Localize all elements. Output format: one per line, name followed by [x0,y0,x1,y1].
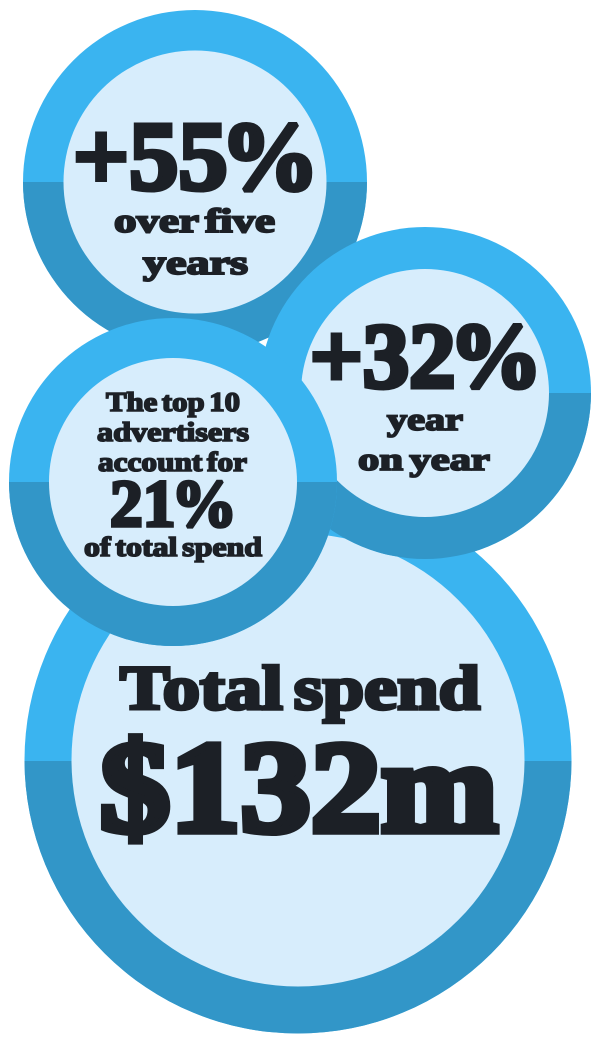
heading: Total spend: Total spend [120,655,480,723]
stat: +32%: +32% [310,305,542,407]
stat: +55%: +55% [73,103,319,211]
label: advertisers: advertisers [97,417,249,447]
stat: $132m: $132m [100,716,498,860]
label: years: years [143,245,248,282]
circle: +55% over five years [23,10,367,354]
label: account for: account for [98,447,247,477]
circle: +32% year on year [259,227,591,559]
label: year: year [387,401,463,437]
stat: 21%: 21% [110,467,237,541]
label: on year: on year [358,441,490,477]
label: of total spend: of total spend [84,532,262,562]
circle: total spend [24,486,572,1034]
label: The top 10: The top 10 [106,387,240,417]
circle: top 10 advertisers [9,318,337,646]
label: over five: over five [114,203,275,240]
